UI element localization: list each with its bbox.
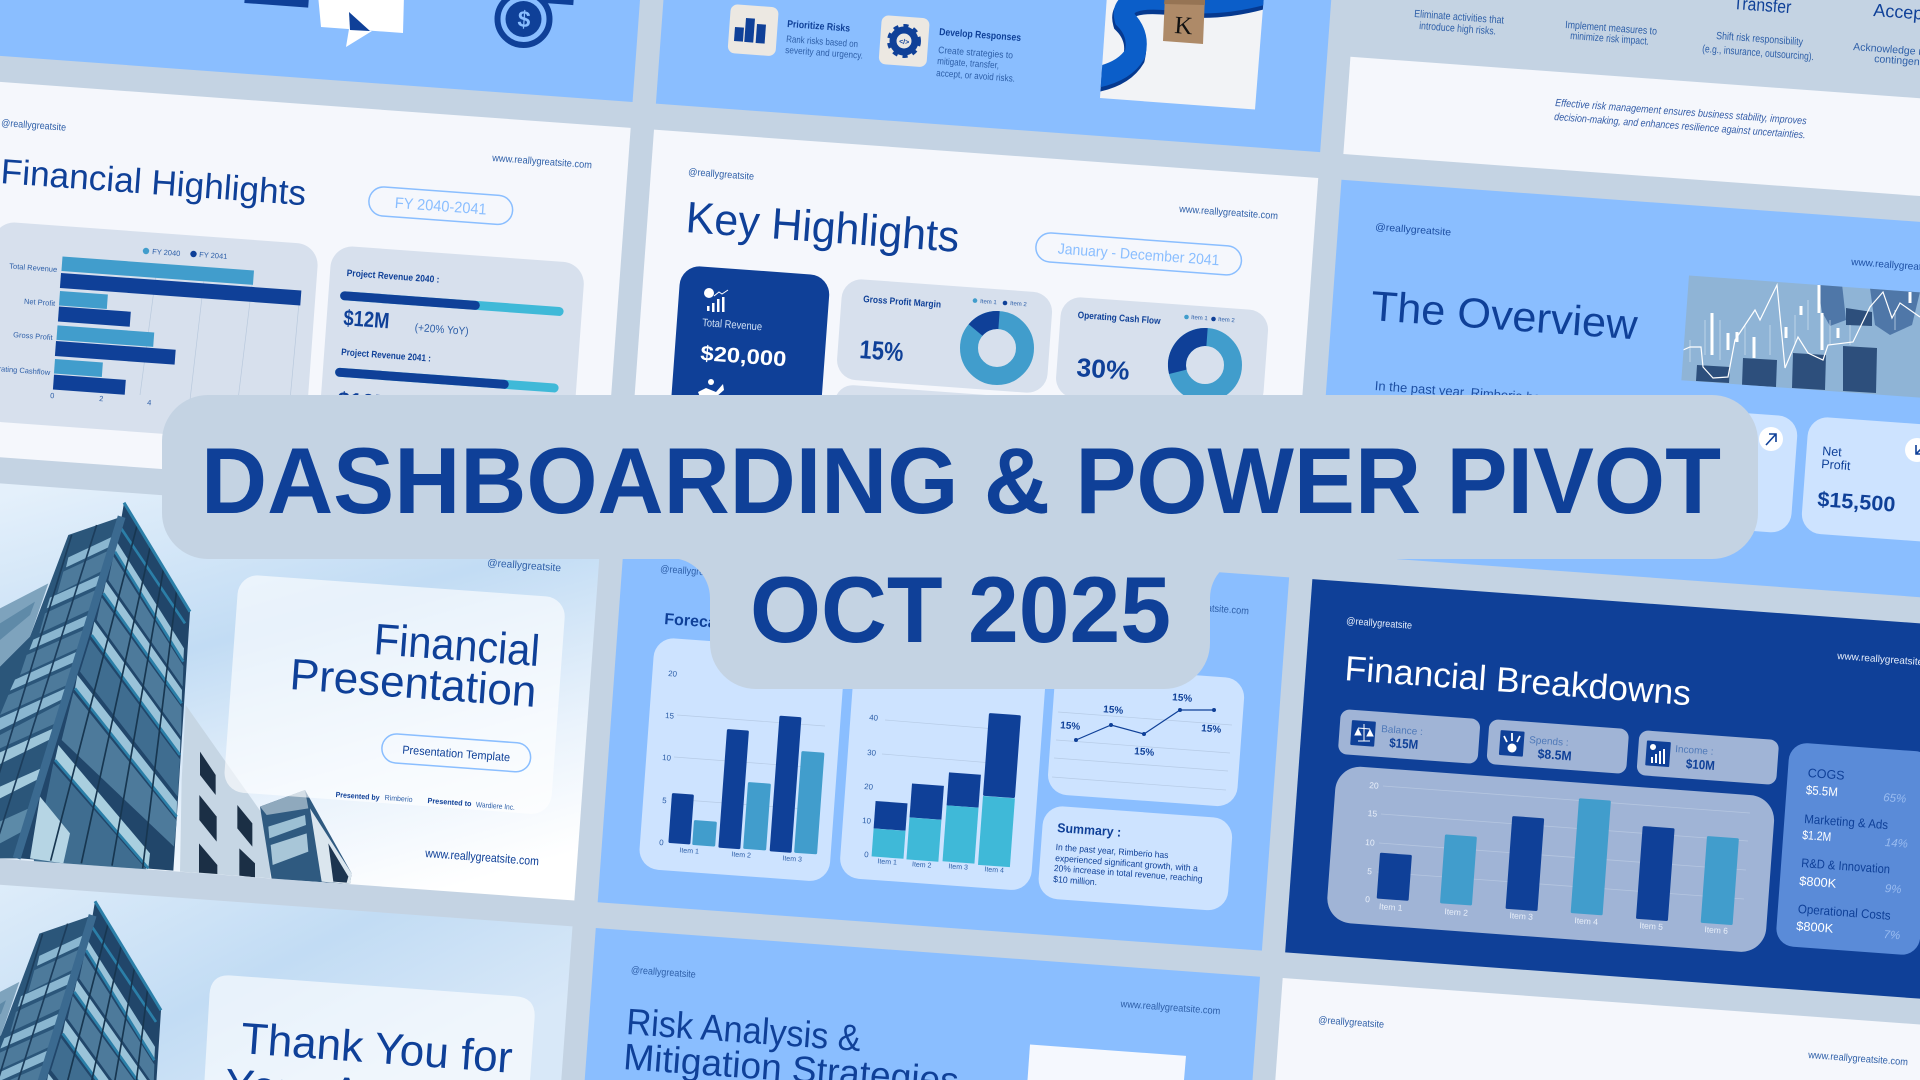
- text: presenters: Presented to: [427, 796, 472, 808]
- text: accept: [1853, 0, 1920, 69]
- axis labels: Gross Profit: [13, 330, 54, 342]
- text: website: www.reallygreatsite.com: [424, 846, 540, 868]
- slide: bottom right: [1318, 1015, 1908, 1068]
- header links: www.reallygreatsite.com: [1119, 999, 1221, 1017]
- panel: cost breakdown: 7%: [1883, 929, 1901, 942]
- panel: column chart: Item 1: [1379, 901, 1403, 913]
- header links: [660, 564, 1249, 617]
- panel: cost breakdown: $1.2M: [1802, 828, 1832, 844]
- card: stacked bar chart: Item 3: [948, 863, 968, 872]
- card: grouped bar chart: 15: [665, 711, 675, 721]
- legend: [1184, 315, 1236, 324]
- stacked bars: [872, 713, 1021, 867]
- slide: risk analysis: [622, 965, 1221, 1080]
- text: develop responses: Develop Responses: [939, 27, 1022, 44]
- panel: column chart: Item 6: [1704, 924, 1729, 936]
- panel: column chart: Item 4: [1574, 915, 1599, 927]
- card: balance: $15M: [1389, 735, 1419, 752]
- text: prioritize risks: Rank risks based on: [786, 34, 858, 50]
- pill: fiscal years: [368, 186, 514, 225]
- panel: project revenue: Project Revenue 2041 :: [341, 347, 431, 365]
- card: spends: Spends :: [1529, 735, 1569, 749]
- pill: date range: [1035, 232, 1242, 276]
- photo: wooden block on blue road: K: [1174, 12, 1194, 40]
- header links: @reallygreatsite: [1375, 222, 1452, 239]
- panel: column chart: 0: [1365, 894, 1371, 904]
- icon: revenue chart: [704, 288, 728, 312]
- header links: @reallygreatsite: [688, 167, 755, 183]
- card: gross profit margin: [836, 278, 1053, 394]
- panel: cost breakdown: [1775, 742, 1920, 956]
- legend: [973, 298, 1028, 308]
- card: line chart: 15%: [1172, 692, 1193, 705]
- panel: project revenue: Project Revenue 2040 :: [346, 268, 440, 286]
- header links: [630, 965, 1221, 1017]
- heading: key highlights: Key Highlights: [684, 193, 961, 262]
- header links: www.reallygreatsite.com: [491, 153, 592, 171]
- progress bar 2041: [335, 368, 559, 393]
- slide: financial presentation: [0, 503, 566, 884]
- panel: cost breakdown: Operational Costs: [1797, 902, 1891, 923]
- slide: risk mitigation options (top right): [1414, 0, 1920, 141]
- card: gross profit margin: 15%: [859, 334, 905, 367]
- header links: [688, 167, 1278, 222]
- heading: risk analysis: [622, 1001, 960, 1080]
- card: grouped bar chart: Item 1: [679, 847, 699, 856]
- icon: dollar coin: $: [517, 6, 532, 32]
- photo: tower building: [0, 900, 162, 1080]
- icon tile: gear: [878, 15, 930, 67]
- text: prioritize risks: [785, 19, 863, 62]
- heading: financial highlights: Financial Highlights: [0, 152, 307, 213]
- photo placeholder: [1028, 1044, 1186, 1080]
- legend: Item 2: [1218, 317, 1236, 324]
- axis labels: Total Revenue: [9, 262, 58, 274]
- text: handle: @reallygreatsite: [487, 557, 562, 574]
- panel: column chart: Item 2: [1444, 906, 1469, 918]
- card: stacked bar chart: 0: [864, 850, 869, 859]
- text: avoid: Eliminate activities that: [1414, 8, 1504, 27]
- header links: [1346, 616, 1920, 670]
- card: net profit: Profit: [1821, 457, 1851, 473]
- panel: cost breakdown: R&D & Innovation: [1801, 856, 1891, 876]
- pill: fiscal years: FY 2040-2041: [394, 195, 487, 219]
- card: total revenue: Total Revenue: [702, 317, 762, 333]
- card: grouped bar chart: [638, 637, 845, 882]
- panel: column chart: 20: [1369, 780, 1379, 791]
- text: develop responses: accept, or avoid risks.: [936, 68, 1015, 85]
- axis labels: 0: [50, 391, 55, 400]
- legend: Item 1: [980, 299, 998, 306]
- panel: horizontal bar chart: [0, 221, 319, 444]
- card: stacked bar chart: 40: [869, 713, 879, 723]
- header links: [1, 118, 592, 171]
- icon tile: gear: </>: [899, 39, 909, 46]
- legend: FY 2040: [152, 247, 181, 258]
- slide: risk responses (top middle): [727, 0, 1265, 110]
- text: presenters: Rimberio: [384, 793, 413, 804]
- heading: financial presentation: Presentation: [288, 650, 538, 717]
- panel: cost breakdown: $5.5M: [1805, 783, 1838, 799]
- card: operating cash flow: [1055, 296, 1269, 412]
- card: line chart: 15%: [1134, 746, 1155, 759]
- text: transfer: [1702, 0, 1814, 63]
- progress bar 2040: [340, 291, 564, 316]
- text: presenters: Wardiere Inc.: [476, 800, 515, 812]
- card: operating cash flow: Operating Cash Flow: [1077, 310, 1161, 327]
- card: line chart: [1047, 665, 1245, 807]
- card: summary: In the past year, Rimberio has: [1055, 842, 1169, 860]
- card: balance: Balance :: [1381, 724, 1423, 738]
- text: presenters: [335, 790, 515, 812]
- header links: @reallygreatsite: [1, 118, 67, 134]
- panel: project revenue: $10M: [337, 387, 393, 416]
- panel: column chart: 5: [1367, 866, 1373, 876]
- slide: top-left icons: [244, 0, 574, 47]
- card: stacked bar chart: [839, 641, 1047, 891]
- panel: cost breakdown: $800K: [1796, 919, 1834, 936]
- banner: title background: [162, 395, 1758, 689]
- text: presenters: Presented by: [335, 790, 381, 802]
- bars: [668, 716, 824, 854]
- panel: column chart: Item 3: [1509, 910, 1534, 922]
- heading: financial presentation: Financial: [372, 615, 541, 676]
- text: develop responses: mitigate, transfer,: [937, 56, 999, 72]
- card: stacked bar chart: 10: [862, 816, 872, 826]
- heading: risk analysis: Risk Analysis &: [625, 1001, 863, 1059]
- title: date: OCT 2025: [750, 557, 1171, 662]
- pill: presentation template: Presentation Template: [402, 744, 510, 764]
- heading: the overview: The Overview: [1369, 282, 1640, 348]
- text: develop responses: [936, 27, 1022, 85]
- text: overview body: In the past year, Rimberio has experienced: [1374, 378, 1622, 411]
- card: translucent title card: [223, 574, 566, 815]
- card: partly hidden lower card: [832, 384, 1046, 459]
- axis labels: Net Profit: [24, 297, 56, 308]
- pill: date range: January - December 2041: [1057, 241, 1220, 269]
- header links: [1375, 222, 1920, 276]
- bars: [53, 256, 301, 395]
- card: grouped bar chart: 0: [659, 838, 664, 847]
- panel: project revenue: $12M: [343, 305, 390, 333]
- text: prioritize risks: Prioritize Risks: [787, 19, 851, 35]
- slide: key highlights: [669, 167, 1278, 459]
- card: income: Income :: [1675, 744, 1714, 758]
- text: italic conclusion: Effective risk management ensures business stability, improves: [1555, 97, 1808, 127]
- text: italic conclusion: decision-making, and enhances resilience against uncertainties.: [1554, 111, 1806, 141]
- text: reduce: minimize risk impact.: [1570, 30, 1649, 48]
- card: stacked bar chart: Item 1: [877, 858, 897, 867]
- card: line chart: 15%: [1103, 704, 1124, 717]
- card: stacked bar chart: Item 2: [912, 861, 932, 870]
- text: reduce: Implement measures to: [1565, 19, 1658, 38]
- text: transfer: Shift risk responsibility: [1716, 30, 1804, 48]
- card: spends: $8.5M: [1537, 746, 1572, 763]
- panel: column chart: 10: [1365, 837, 1375, 848]
- card: grouped bar chart: Item 3: [782, 855, 802, 864]
- card: line chart: 15%: [1060, 720, 1081, 733]
- text: italic conclusion: [1554, 97, 1808, 141]
- heading: financial presentation: [288, 615, 541, 717]
- card: stacked bar chart: 20: [864, 782, 874, 792]
- card: grouped bar chart: 5: [662, 796, 667, 805]
- card: translucent title card: [204, 975, 535, 1080]
- photo: coin stacks with stock chart: [1681, 276, 1920, 398]
- card: grouped bar chart: 20: [668, 669, 678, 679]
- panel: cost breakdown: Marketing & Ads: [1804, 812, 1889, 832]
- slide: bottom right: @reallygreatsite: [1318, 1015, 1385, 1031]
- header links: @reallygreatsite: [1346, 616, 1413, 632]
- axis labels: 4: [147, 398, 152, 407]
- panel: column chart: Item 5: [1639, 920, 1664, 932]
- icon: hand holding coin: [698, 379, 724, 397]
- card: summary: $10 million.: [1053, 874, 1097, 887]
- card: net profit: Net: [1822, 444, 1843, 459]
- header links: www.reallygreatsite.com: [1148, 599, 1249, 617]
- panel: column chart: [1326, 765, 1776, 954]
- card: stacked bar chart: Item 4: [984, 866, 1004, 875]
- legend: FY 2041: [199, 250, 228, 261]
- header links: @reallygreatsite: [630, 965, 696, 981]
- card: spends: [1486, 719, 1629, 774]
- card: grouped bar chart: 10: [662, 753, 672, 763]
- gridlines: [140, 275, 300, 400]
- text: avoid: introduce high risks.: [1419, 20, 1496, 38]
- card: summary: Summary :: [1057, 820, 1122, 840]
- photo: wooden block on blue road: [1097, 0, 1265, 110]
- panel: cost breakdown: 9%: [1884, 883, 1902, 896]
- legend: Item 1: [1191, 315, 1209, 322]
- heading: forecast: Forecast: [664, 611, 732, 633]
- axis labels: [0, 262, 152, 407]
- icon: speech bubble: [318, 0, 404, 47]
- axis labels: 2: [99, 394, 104, 403]
- card: stacked bar chart: 30: [867, 748, 877, 758]
- card: summary: 20% increase in total revenue, reaching: [1054, 863, 1203, 884]
- card: total revenue: $20,000: [700, 342, 787, 371]
- slide: thank you: [0, 901, 535, 1080]
- donut: 15 percent: [958, 309, 1036, 387]
- panel: cost breakdown: COGS: [1807, 766, 1845, 783]
- card: gross profit margin: Gross Profit Margin: [863, 294, 942, 311]
- legend: Item 2: [1010, 301, 1028, 308]
- bars: [1377, 798, 1739, 925]
- header links: @reallygreatsite: [660, 564, 727, 580]
- card: net profit: $15,500: [1817, 488, 1896, 517]
- card: income: [1636, 730, 1779, 785]
- pill: presentation template: [381, 733, 532, 773]
- slide: the overview: [1369, 222, 1920, 545]
- panel: cost breakdown: 65%: [1883, 792, 1907, 806]
- text: develop responses: Create strategies to: [938, 45, 1013, 61]
- icon: dollar coin: [498, 0, 574, 45]
- card: total revenue: [669, 265, 831, 445]
- slide: bottom right: www.reallygreatsite.com: [1807, 1050, 1908, 1068]
- card: summary: experienced significant growth, with a: [1055, 853, 1198, 873]
- panel: column chart: 15: [1367, 808, 1378, 819]
- card: summary: [1037, 805, 1233, 912]
- header links: www.reallygreatsite.com: [1178, 204, 1278, 222]
- card: net profit: [1800, 416, 1920, 545]
- photo: tower building: [0, 503, 352, 884]
- text: prioritize risks: severity and urgency.: [785, 45, 863, 62]
- card: grouped bar chart: Item 2: [731, 851, 751, 860]
- slide: financial breakdowns: [1326, 616, 1920, 956]
- card: income: $10M: [1685, 756, 1715, 773]
- legend: [143, 247, 228, 261]
- text: reduce: [1565, 19, 1658, 48]
- icon tile: bar chart: [727, 4, 779, 56]
- panel: project revenue: [318, 245, 585, 453]
- slide: forecast: [638, 564, 1249, 912]
- heading: financial breakdowns: Financial Breakdowns: [1343, 649, 1692, 713]
- panel: project revenue: (+20% YoY): [414, 322, 469, 338]
- card: metric with arrow: [1639, 406, 1799, 534]
- donut: 30 percent: [1171, 331, 1239, 399]
- title: dashboarding and power pivot: DASHBOARDING & POWER PIVOT: [201, 428, 1721, 533]
- text: avoid: [1414, 8, 1504, 38]
- text: transfer: (e.g., insurance, outsourcing).: [1702, 43, 1814, 63]
- card: balance: [1338, 709, 1481, 764]
- panel: cost breakdown: 14%: [1884, 837, 1908, 851]
- card: line chart: 15%: [1201, 723, 1222, 736]
- panel: cost breakdown: $800K: [1799, 874, 1837, 891]
- card: operating cash flow: 30%: [1076, 352, 1131, 386]
